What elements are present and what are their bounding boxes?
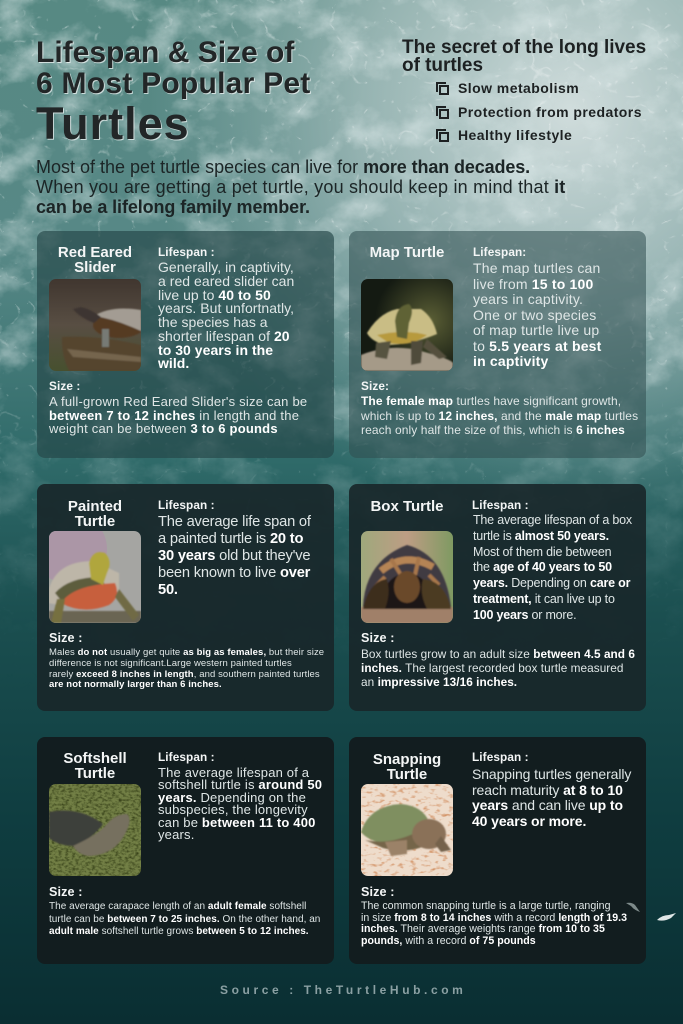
size label: Size : (49, 885, 82, 899)
lifespan description: to 5.5 years at best (473, 338, 602, 354)
photo: box turtle (361, 531, 453, 623)
lifespan description: the species has a (158, 314, 268, 330)
species name (68, 498, 122, 530)
lifespan description: The map turtles can (473, 260, 601, 276)
size description: difference is not significant.Large western painted turtles (49, 658, 292, 669)
lifespan description: subspecies, the longevity (158, 802, 308, 817)
lifespan description: wild. (158, 355, 189, 371)
size description (361, 901, 627, 947)
size description: The average carapace length of an adult female softshell (49, 901, 306, 912)
heading: the secret of the long lives: of turtles (402, 55, 483, 76)
size description: pounds, with a record of 75 pounds (361, 935, 536, 947)
lifespan description: years. But unfortnatly, (158, 300, 294, 316)
species name: Turtle (75, 765, 115, 782)
lifespan description: turtle is almost 50 years. (473, 529, 609, 543)
lifespan text (473, 245, 602, 369)
size label: Size : (49, 379, 80, 393)
size label: Size : (361, 631, 394, 645)
size description (361, 394, 638, 437)
intro text: Most of the pet turtle species can live for more than decades. (36, 157, 530, 177)
species name: Softshell (63, 750, 127, 767)
species name: Snapping (373, 751, 441, 768)
size description (49, 394, 307, 436)
size description: The common snapping turtle is a large turtle, ranging (361, 900, 610, 912)
lifespan description (473, 260, 602, 369)
icon: bullet (436, 129, 449, 142)
lifespan description: One or two species (473, 306, 596, 322)
lifespan description: The average lifespan of a box (473, 513, 632, 527)
lifespan description: years and can live up to (472, 797, 623, 813)
lifespan description (158, 514, 311, 598)
lifespan description: softshell turtle is around 50 (158, 777, 322, 792)
size description (49, 901, 320, 937)
lifespan description: live from 15 to 100 (473, 276, 594, 292)
lifespan description: 50. (158, 582, 178, 598)
heading: the secret of the long lives (402, 36, 646, 76)
size label: Size : (361, 885, 394, 899)
panel: Red Eared Slider (37, 231, 334, 458)
photo: softshell turtle (49, 784, 141, 876)
species name: Red Eared (58, 244, 132, 261)
lifespan label: Lifespan : (472, 750, 529, 764)
lifespan text (472, 750, 632, 829)
icon: birds (622, 900, 677, 928)
title: 6 Most Popular Pet (36, 67, 311, 100)
lifespan label: Lifespan : (158, 498, 215, 512)
list: reasons for long lives (436, 80, 642, 143)
size description (49, 647, 324, 690)
panel: Map Turtle (349, 231, 646, 458)
species name: Box Turtle (370, 498, 444, 515)
size description (361, 647, 635, 689)
photo: snapping turtle (361, 784, 453, 876)
panel: Painted Turtle (37, 484, 334, 711)
lifespan description: treatment, it can live up to (473, 592, 615, 606)
panel: Softshell Turtle (37, 737, 334, 964)
panel: Box Turtle (349, 484, 646, 711)
species name: Turtle (387, 766, 427, 783)
photo: painted turtle (49, 531, 141, 623)
lifespan description: shorter lifespan of 20 (158, 328, 290, 344)
size description: between 7 to 12 inches in length and the (49, 408, 299, 423)
lifespan description (158, 259, 294, 371)
species name: Painted (68, 498, 122, 515)
size description: adult male softshell turtle grows between 5 to 12 inches. (49, 926, 309, 937)
lifespan description: The average lifespan of a (158, 765, 309, 780)
size label: Size : (49, 631, 82, 645)
intro text (36, 157, 566, 217)
size description: reach only half the size of this, which is 6 inches (361, 423, 625, 437)
list item: Protection from predators (458, 104, 642, 120)
lifespan description: Generally, in captivity, (158, 259, 294, 275)
lifespan description (158, 765, 322, 842)
lifespan description: years in captivity. (473, 291, 583, 307)
size description: in size from 8 to 14 inches with a record length of 19.3 (361, 912, 627, 924)
title: Turtles (36, 98, 190, 149)
intro text: can be a lifelong family member. (36, 197, 310, 217)
lifespan description: been known to live over (158, 565, 310, 581)
intro text: When you are getting a pet turtle, you should keep in mind that it (36, 177, 566, 197)
lifespan label: Lifespan : (472, 498, 529, 512)
size text (361, 631, 635, 689)
photo: red eared slider (49, 279, 141, 371)
title: Lifespan & Size of (36, 36, 294, 69)
size description: an impressive 13/16 inches. (361, 675, 517, 689)
icon: bullet (436, 82, 449, 95)
lifespan description: a painted turtle is 20 to (158, 531, 303, 547)
lifespan text (472, 498, 632, 622)
lifespan description: of map turtle live up (473, 322, 599, 338)
lifespan description: 30 years old but they've (158, 548, 310, 564)
lifespan description: years. (158, 827, 194, 842)
lifespan description: The average life span of (158, 514, 311, 530)
size description: inches. The largest recorded box turtle measured (361, 661, 624, 675)
species name (63, 750, 127, 782)
size text (49, 631, 324, 690)
lifespan text (158, 750, 322, 842)
lifespan label: Lifespan : (158, 245, 215, 259)
heading: the secret of the long lives: The secret of the long lives (402, 36, 646, 58)
size description: weight can be between 3 to 6 pounds (49, 421, 278, 436)
list item: Slow metabolism (458, 80, 579, 96)
lifespan description: reach maturity at 8 to 10 (472, 782, 623, 798)
lifespan text (158, 498, 311, 598)
size description: turtle can be between 7 to 25 inches. On the other hand, an (49, 914, 320, 924)
size description: rarely exceed 8 inches in length, and southern painted turtles (49, 669, 320, 680)
lifespan description: 100 years or more. (473, 608, 576, 622)
species name: Turtle (75, 513, 115, 530)
icon: bullet (436, 106, 449, 119)
lifespan description (472, 767, 631, 830)
lifespan description: 40 years or more. (472, 813, 586, 829)
size description: which is up to 12 inches, and the male map turtles (361, 408, 638, 422)
size text (49, 885, 320, 937)
lifespan text (158, 245, 294, 371)
lifespan description: in captivity (473, 353, 549, 369)
size description: The female map turtles have significant growth, (361, 394, 621, 408)
lifespan description: can be between 11 to 400 (158, 815, 316, 830)
lifespan description: live up to 40 to 50 (158, 286, 271, 302)
lifespan description: years. Depending on the (158, 790, 306, 805)
photo: map turtle (361, 279, 453, 371)
lifespan label: Lifespan: (473, 245, 526, 259)
species name (373, 751, 441, 783)
species name: Slider (74, 259, 116, 276)
size text (361, 379, 638, 437)
size description: Males do not usually get quite as big as females, but their size (49, 647, 324, 658)
size description: Box turtles grow to an adult size between 4.5 and 6 (361, 647, 635, 661)
species name: Map Turtle (370, 244, 444, 261)
size label: Size: (361, 379, 389, 393)
lifespan description (473, 513, 632, 622)
size description: inches. Their average weights range from 10 to 35 (361, 923, 605, 935)
species name (58, 244, 132, 276)
size text (361, 884, 641, 949)
lifespan description: a red eared slider can (158, 273, 294, 289)
lifespan label: Lifespan : (158, 750, 215, 764)
size description: A full-grown Red Eared Slider's size can be (49, 394, 307, 409)
lifespan description: years. Depending on care or (473, 576, 630, 590)
title (36, 36, 311, 149)
list item: Healthy lifestyle (458, 127, 572, 143)
source credit: Source : TheTurtleHub.com (220, 983, 466, 997)
lifespan description: Most of them die between (473, 545, 611, 559)
size text (49, 379, 307, 436)
lifespan description: the age of 40 years to 50 (473, 560, 612, 574)
panel: Snapping Turtle (349, 737, 646, 964)
lifespan description: to 30 years in the (158, 342, 273, 358)
size description: are not normally larger than 6 inches. (49, 679, 222, 690)
lifespan description: Snapping turtles generally (472, 766, 631, 782)
